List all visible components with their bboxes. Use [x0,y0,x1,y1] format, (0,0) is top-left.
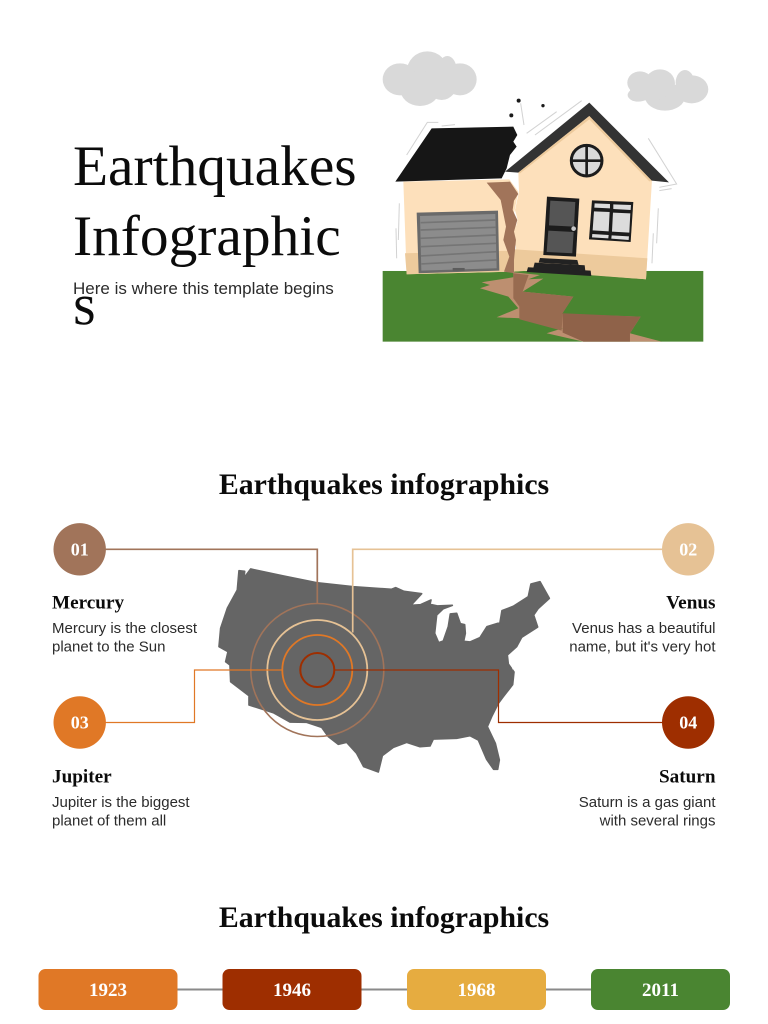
connector: 02 [353,549,663,632]
marker 03 [53,696,106,749]
door [543,197,579,257]
year 1923 [38,969,178,1010]
text block: Mercury [52,592,198,656]
right window [589,200,633,242]
connector: 04 [334,670,663,722]
text block: Venus [569,592,716,656]
text block: Saturn: Saturn is a gas giant [579,794,716,811]
text block: Saturn: with several rings [599,812,716,830]
timeline [38,969,730,1010]
round window [571,145,602,176]
year 1968 [407,969,546,1010]
garage door [417,211,499,273]
icon: left cloud [383,51,477,106]
marker 04 [662,696,714,749]
title [73,135,357,333]
marker 01 [53,523,106,576]
text block: Saturn: Saturn [659,766,716,788]
ground [383,271,703,342]
subtitle: Here is where this template begins [73,279,334,298]
marker 01: 01 [71,540,89,560]
connector: 01 [105,549,317,604]
year 1968: 1968 [458,980,496,1001]
title: Earthquakes [73,135,357,198]
text block: Jupiter [52,766,190,830]
text block: Jupiter: Jupiter is the biggest [52,794,190,811]
left wall [403,179,518,274]
text block: Mercury: Mercury is the closest [52,620,198,637]
title: S [73,287,96,333]
marker 04: 04 [679,713,697,733]
marker 03: 03 [71,713,89,733]
heading: section one: Earthquakes infographics [219,468,549,501]
title: Infographic [73,205,341,268]
year 2011: 2011 [642,980,679,1001]
connector: 03 [105,670,282,722]
shake marks [396,101,677,263]
steps [527,258,591,276]
text block: Mercury: planet to the Sun [52,638,165,656]
text block: Saturn [579,766,716,830]
wall crack [487,182,518,273]
year 2011 [591,969,730,1010]
text block: Jupiter: planet of them all [52,812,166,830]
text block: Venus: Venus [666,592,716,614]
map of the United States [219,569,549,772]
marker 02 [662,523,714,576]
right roof [505,103,669,182]
text block: Venus: name, but it's very hot [569,638,716,656]
right wall [513,115,652,279]
epicenter rings [251,604,384,736]
illustration: cracked house [383,51,708,342]
text block: Jupiter: Jupiter [52,766,112,788]
year 1946 [222,969,362,1010]
left roof [395,127,517,182]
heading: section two: Earthquakes infographics [219,901,549,934]
debris [509,99,545,117]
ground crack [480,272,662,342]
icon: right cloud [627,69,708,111]
text block: Venus: Venus has a beautiful [572,620,716,637]
marker 02: 02 [679,540,697,560]
text block: Mercury: Mercury [52,592,124,614]
year 1946: 1946 [273,980,311,1001]
year 1923: 1923 [89,980,127,1001]
